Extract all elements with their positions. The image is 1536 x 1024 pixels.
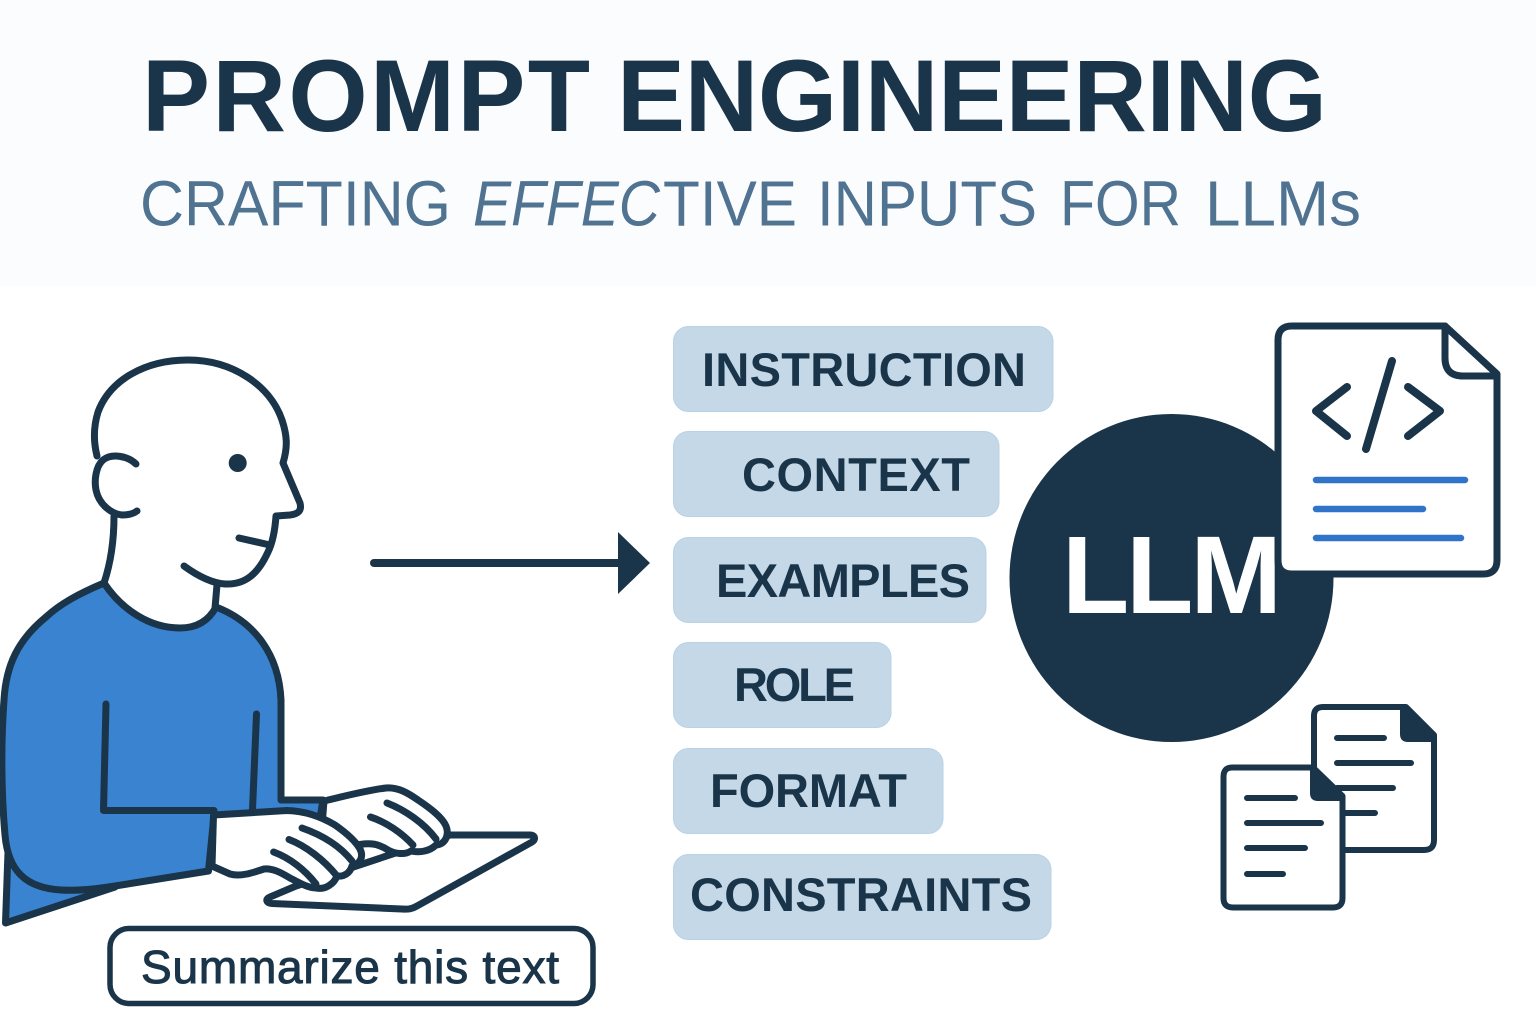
LLM circle: [1010, 414, 1334, 742]
tablet: [267, 835, 534, 909]
arrow: [374, 532, 650, 594]
pill: constraints: [674, 854, 1051, 940]
front hand: [212, 810, 362, 888]
pill: context: [674, 432, 999, 516]
pill: role: ROLE: [734, 658, 855, 711]
title: PROMPT: [142, 39, 590, 153]
pill: examples: [674, 538, 986, 622]
pill: context: CONTEXT: [742, 448, 970, 501]
subtitle: INPUTS: [817, 168, 1037, 240]
subtitle: [140, 168, 1361, 240]
title: [142, 39, 1327, 153]
pill: format: FORMAT: [710, 764, 907, 817]
back hand: [322, 788, 447, 854]
subtitle: LLMs: [1205, 168, 1361, 240]
pill: format: [674, 748, 943, 834]
pill: examples: EXAMPLES: [716, 554, 970, 607]
prompt input box: [110, 928, 593, 1004]
eye: [229, 454, 247, 472]
LLM circle: LLM: [1062, 514, 1282, 637]
icon: stacked documents: [1224, 707, 1434, 908]
front document: [1224, 768, 1342, 908]
person illustration: [2, 360, 534, 923]
icon: code document: [1278, 326, 1497, 574]
arm lines: [104, 704, 256, 810]
title: ENGINEERING: [617, 39, 1327, 153]
front hand fingers: [274, 828, 352, 884]
pill: constraints: CONSTRAINTS: [690, 868, 1032, 921]
subtitle: EFFEC: [473, 168, 661, 240]
pill: instruction: INSTRUCTION: [702, 343, 1026, 396]
pill: instruction: [674, 326, 1053, 412]
pill: role: [674, 642, 891, 728]
head: [94, 360, 301, 584]
ear: [95, 456, 137, 515]
neck: [104, 516, 217, 608]
sweater body: [2, 583, 323, 890]
subtitle: FOR: [1060, 168, 1181, 240]
prompt input box: Summarize this text: [141, 941, 559, 993]
sweater lower triangle: [6, 852, 115, 923]
mouth: [239, 538, 270, 545]
header band: [0, 0, 1536, 286]
subtitle: CRAFTING: [140, 168, 451, 240]
back hand fingers: [370, 803, 436, 845]
back document: [1314, 707, 1434, 850]
prompt components list: [674, 326, 1053, 940]
subtitle: TIVE: [663, 168, 797, 240]
